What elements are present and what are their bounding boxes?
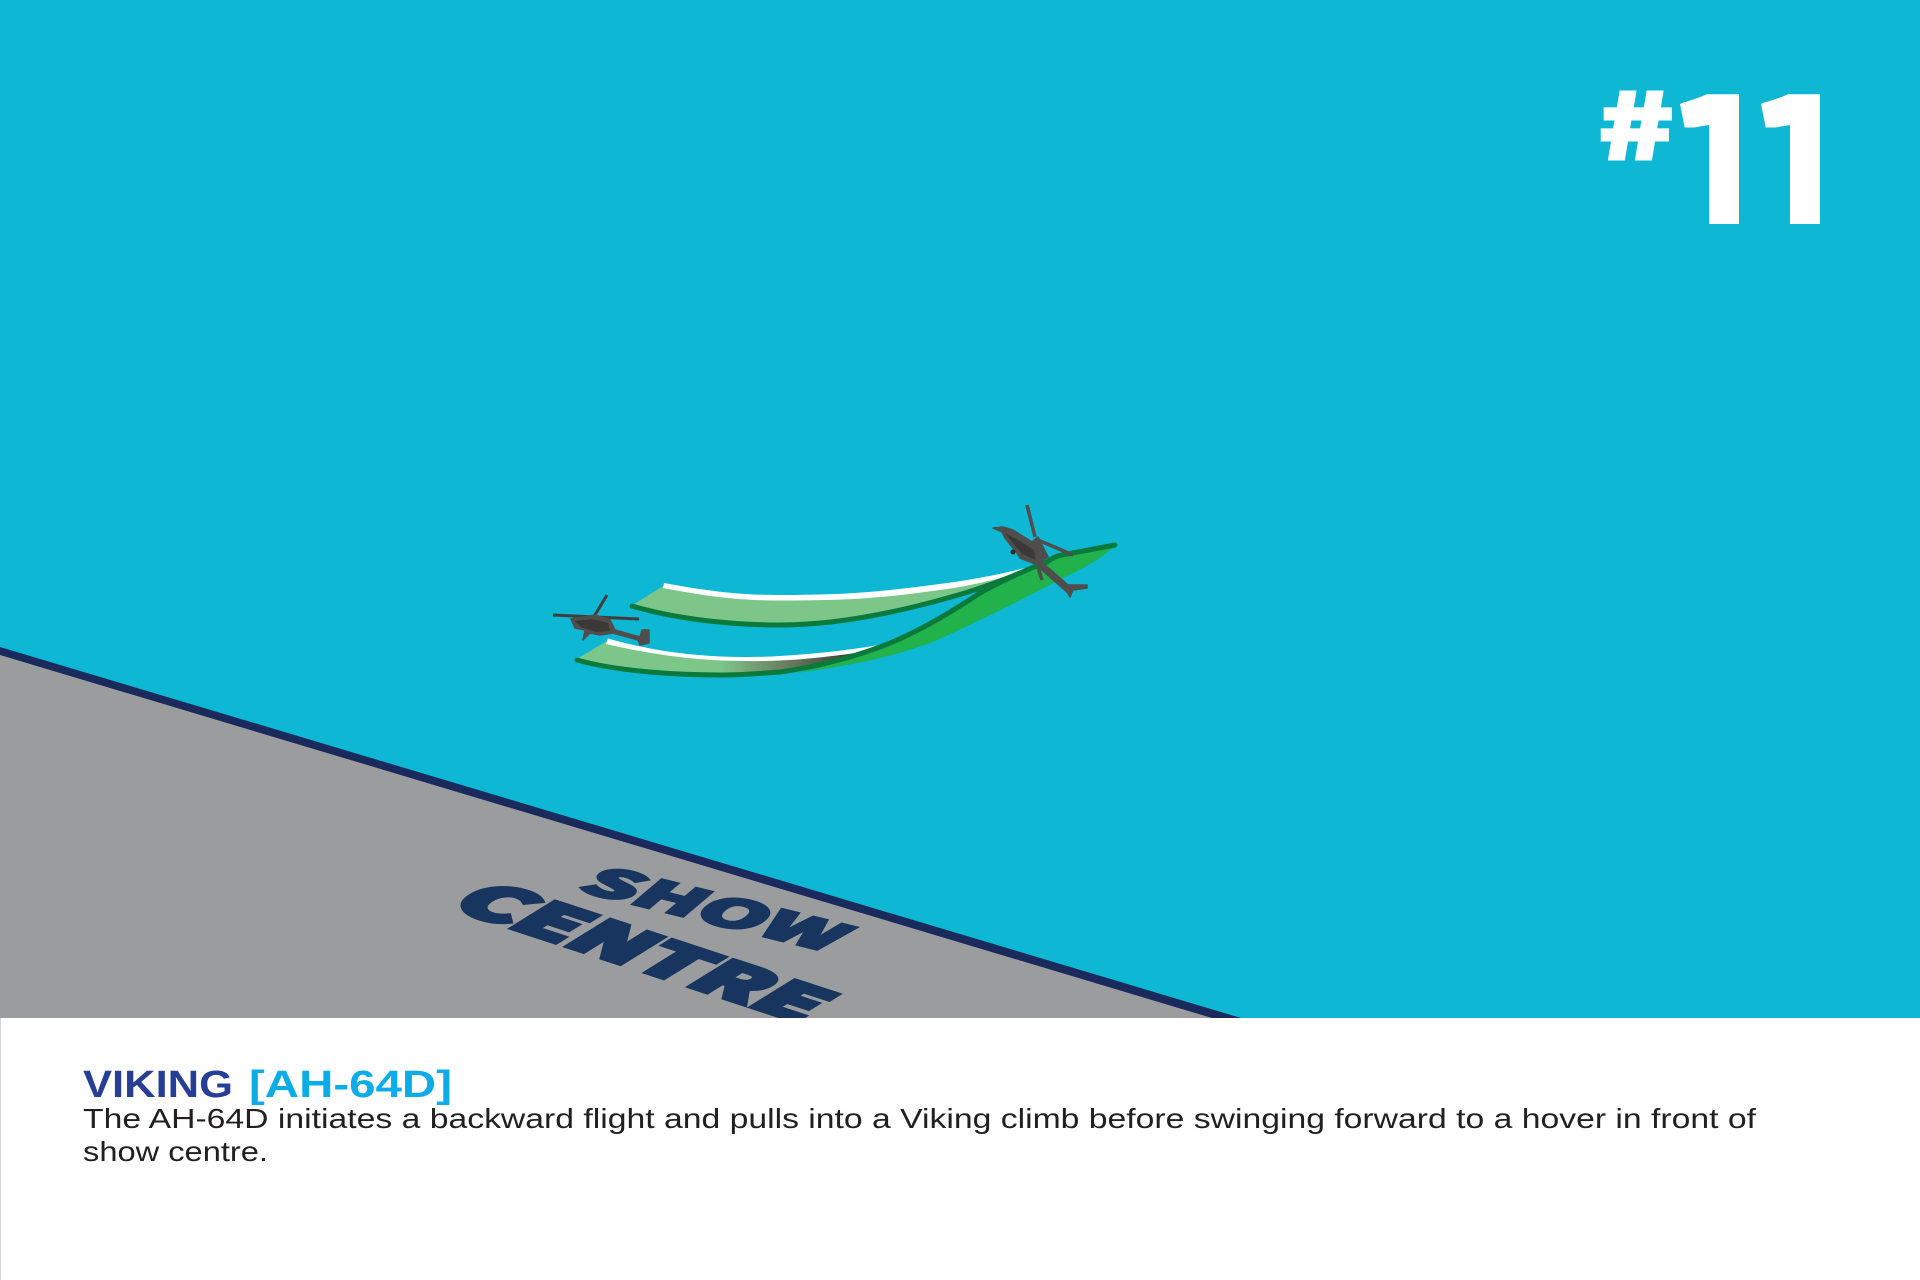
upper ribbon xyxy=(630,565,1037,625)
second digit: 1 xyxy=(1721,19,1866,274)
icon: upper helicopter xyxy=(993,505,1087,597)
cockpit shading xyxy=(1005,533,1036,560)
label: CENTRE: CENTRE xyxy=(430,866,867,1034)
upper ribbon dark edge xyxy=(632,573,1020,625)
icon: lower helicopter xyxy=(553,595,649,645)
cockpit shading xyxy=(575,619,610,632)
lower ribbon white edge xyxy=(606,638,882,661)
heading xyxy=(83,1064,452,1106)
heading: aircraft type: [AH-64D] xyxy=(249,1064,452,1106)
hash sign: # xyxy=(1598,55,1674,185)
panel: ground with show centre marking xyxy=(0,647,1241,1034)
number badge xyxy=(1600,90,1820,224)
description line one: The AH-64D initiates a backward flight and pulls into a Viking climb before swinging forward to a hover in front of xyxy=(83,1103,1756,1134)
description text xyxy=(83,1103,1756,1167)
lower ribbon and climb dark edge xyxy=(577,545,1115,675)
main rotor xyxy=(1027,505,1073,580)
first digit: 1 xyxy=(1640,19,1785,274)
description line two: show centre. xyxy=(83,1136,268,1167)
lower ribbon xyxy=(577,545,1115,675)
upper ribbon white edge xyxy=(663,565,1037,600)
airframe xyxy=(993,527,1087,597)
main rotor xyxy=(553,595,639,619)
heading: manoeuvre name: VIKING xyxy=(83,1064,233,1106)
landing gear xyxy=(1010,550,1016,554)
flight path ribbons xyxy=(577,545,1116,675)
climb ribbon xyxy=(790,545,1116,674)
sky background xyxy=(0,0,1920,1018)
ground surface xyxy=(0,650,1235,1018)
panel: description background xyxy=(0,1018,1920,1280)
label: SHOW: SHOW xyxy=(564,851,874,962)
ground edge line xyxy=(0,647,1241,1018)
airframe xyxy=(571,615,649,645)
